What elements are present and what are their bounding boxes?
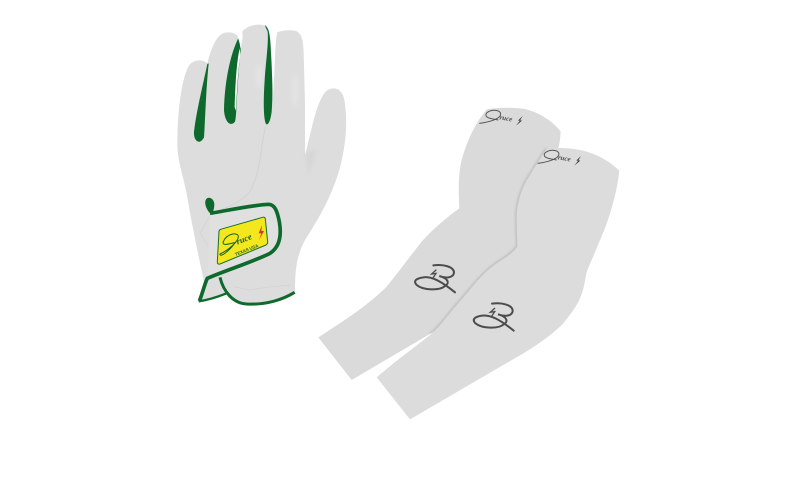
patch wordmark: ruce [235,231,253,247]
cuff green binding [220,277,295,304]
lower flap binding [199,293,227,301]
patch signature [220,234,238,255]
back sleeve cuff mark: ruce [499,113,513,124]
glove shading [200,65,317,290]
flap tab [205,198,214,213]
front sleeve logo [474,303,514,331]
sleeve overlap shadow [430,149,547,335]
front sleeve cuff mark: ruce [557,153,571,164]
finger gap: ring to middle [224,37,242,124]
closure and patch [199,198,295,304]
patch lightning bolt [259,225,264,240]
yellow patch [217,217,268,264]
ring to middle notch [238,30,243,49]
glove [177,25,346,305]
finger gap: middle to index [264,25,272,124]
finger gaps [194,25,277,142]
back sleeve cuff mark [479,110,523,126]
back sleeve logo [415,265,455,292]
finger gap: pinky to ring [194,63,209,142]
flap panel [207,206,279,277]
patch location text: TEXAS USA [234,243,260,257]
front sleeve [377,148,619,419]
middle to index slit [270,29,277,107]
back sleeve [318,108,561,380]
flap green binding [199,204,280,301]
ring to middle slit [235,48,240,111]
front sleeve cuff mark [538,150,581,166]
arm sleeves [318,108,619,419]
glove body [177,25,346,305]
product illustration [177,24,620,420]
